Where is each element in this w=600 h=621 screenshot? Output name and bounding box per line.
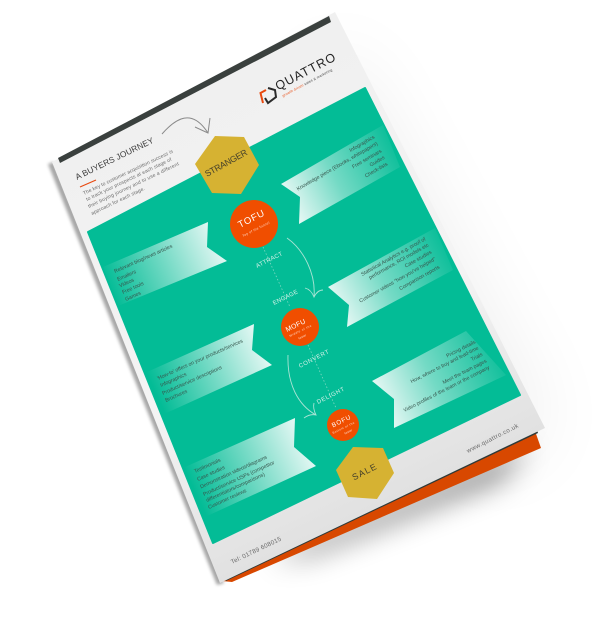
ribbon: testimonials content: differentiators/comparisons) bbox=[205, 472, 266, 504]
intro paragraph bbox=[82, 149, 181, 217]
ribbon: testimonials content: Customer reviews bbox=[207, 488, 248, 511]
curved arrow to stranger bbox=[162, 118, 210, 134]
circle: bofu: BOFU bbox=[331, 414, 352, 429]
stage labels bbox=[255, 251, 346, 406]
ribbon: knowledge content: Knowledge piece (Ebooks, whitepapers) bbox=[296, 141, 379, 193]
page shadows bbox=[48, 40, 550, 585]
ribbon: blog content: Games bbox=[124, 290, 142, 303]
ribbon: analytics content: Comparison reports bbox=[398, 264, 441, 292]
ribbon: pricing content: Trials bbox=[470, 352, 484, 363]
ribbon: how-to content: 'How-to' offers on your products/services bbox=[156, 338, 244, 382]
circle: mofu bbox=[281, 308, 319, 346]
hexagon: sale bbox=[336, 447, 394, 499]
footer: website: www.quattro.co.uk bbox=[465, 422, 521, 455]
heading underline bbox=[80, 180, 96, 187]
ribbon: blog content: Free tools bbox=[121, 281, 145, 296]
intro paragraph: their buying journey and to use a different bbox=[87, 161, 181, 210]
stage labels: DELIGHT bbox=[316, 387, 346, 406]
ribbon: pricing content: Meet the team pages bbox=[442, 358, 488, 386]
logo wordmark: QUATTRO bbox=[273, 50, 338, 93]
ribbon: testimonials content bbox=[185, 418, 316, 517]
back cover: orange bbox=[222, 431, 541, 582]
logo tagline: growth driven sales & marketing bbox=[282, 68, 333, 98]
back page dark edge bbox=[224, 430, 538, 581]
ribbon: blog content: Videos bbox=[118, 277, 136, 289]
curved arrow: mofu to bofu bbox=[288, 355, 316, 418]
ribbon: pricing content: Video profiles of the team or the company bbox=[403, 365, 491, 414]
stage labels: ATTRACT bbox=[255, 251, 284, 270]
ribbon: knowledge content bbox=[281, 125, 400, 224]
heading: a buyers journey: A BUYERS JOURNEY bbox=[73, 135, 156, 182]
ribbon: analytics content: Case studies bbox=[404, 249, 433, 270]
intro paragraph: The key to customer acquisition success is bbox=[82, 149, 175, 197]
ribbon: blog content: Emailers bbox=[116, 269, 138, 283]
circle: bofu: Bottom of the bbox=[332, 421, 355, 435]
curved arrow: tofu to mofu bbox=[287, 238, 323, 297]
logo icon bbox=[260, 88, 276, 103]
ribbon: how-to content: Product/service descriptions bbox=[161, 365, 223, 397]
ribbon: analytics content: Customer videos "how you've helped" bbox=[358, 256, 437, 305]
circle: mofu: Middle of the bbox=[289, 324, 312, 338]
brochure page bbox=[52, 12, 545, 583]
ribbon: testimonials content: Product/service USPs (competitor bbox=[202, 460, 276, 498]
ribbon: how-to content: Brochures bbox=[164, 389, 189, 404]
circle: tofu: TOFU bbox=[236, 208, 266, 231]
ribbon: pricing content: How, where to buy and lead-time bbox=[410, 345, 480, 385]
stage labels: CONVERT bbox=[298, 349, 331, 370]
ribbon: testimonials content: Demonstration videos/diagrams bbox=[199, 454, 269, 490]
ribbon: testimonials content: Case studies bbox=[196, 465, 226, 483]
hexagon: sale: SALE bbox=[350, 462, 378, 482]
logo bbox=[260, 50, 338, 103]
ribbon: knowledge content: Check-lists bbox=[364, 161, 389, 179]
ribbon: testimonials content: Testimonials bbox=[193, 457, 222, 475]
circle: bofu: funnel bbox=[344, 428, 353, 435]
ribbon: how-to content: Infographics bbox=[159, 372, 188, 389]
circle: mofu: MOFU bbox=[285, 318, 307, 334]
circle: tofu bbox=[230, 200, 278, 248]
ribbon: how-to content bbox=[147, 324, 272, 415]
intro paragraph: approach for each stage. bbox=[90, 186, 146, 217]
ribbon: blog content: Relevant blog/news articles bbox=[113, 243, 174, 275]
stage labels: ENGAGE bbox=[272, 289, 299, 307]
footer: telephone: Tel: 01789 608015 bbox=[230, 536, 283, 566]
ribbon: knowledge content: Infographics bbox=[349, 134, 376, 154]
ribbon: pricing content: Pricing details bbox=[445, 339, 477, 359]
hexagon: stranger bbox=[195, 136, 259, 194]
top dark bar bbox=[58, 16, 331, 163]
circle: tofu: Top of the funnel bbox=[242, 221, 270, 238]
intro paragraph: to track your prospects at each stage of bbox=[85, 157, 173, 203]
ribbon: analytics content: Statistical Analytics e.g. proof of bbox=[360, 236, 427, 278]
ribbon: knowledge content: Free seminars bbox=[351, 148, 383, 170]
ribbon: analytics content: performance, ROI models etc bbox=[368, 242, 430, 281]
circle: bofu bbox=[327, 409, 359, 441]
circle: mofu: funnel bbox=[298, 333, 307, 340]
green panel bbox=[88, 88, 520, 543]
ribbon: pricing content bbox=[372, 331, 506, 428]
dashed funnel connector bbox=[263, 247, 336, 408]
hexagon: stranger: STRANGER bbox=[203, 147, 249, 179]
ribbon: analytics content bbox=[328, 228, 453, 327]
ribbon: knowledge content: Guides bbox=[369, 155, 386, 168]
ribbon: blog content bbox=[103, 222, 227, 306]
